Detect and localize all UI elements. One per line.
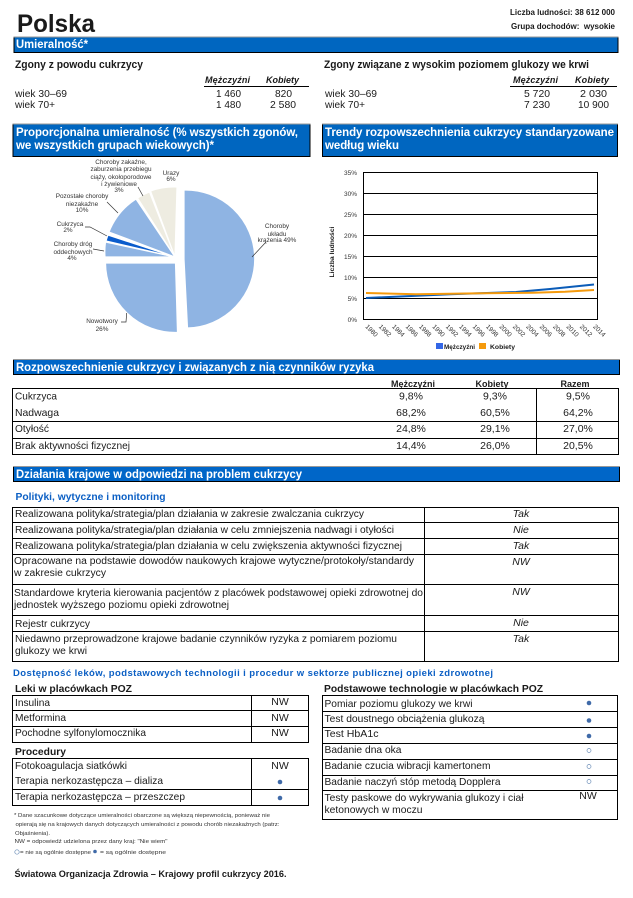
footnotes and legend: = nie są ogólnie dostępne — [20, 850, 92, 856]
table: policies, guidelines and monitoring: w zakresie cukrzycy — [13, 568, 106, 579]
table: medicines in primary care — [12, 683, 308, 742]
subheading: policies: Polityki, wytyczne i monitoring — [16, 491, 166, 503]
table: prevalence and risk factors: Razem — [560, 379, 590, 389]
x axis labels: 2012 — [578, 323, 593, 339]
x axis labels: 2006 — [538, 323, 553, 339]
section header: trends — [322, 124, 618, 156]
section header: proportional mortality — [12, 124, 310, 156]
table: policies, guidelines and monitoring: Tak — [513, 540, 530, 552]
x axis labels: 1996 — [471, 323, 486, 339]
table: policies, guidelines and monitoring: Realizowana polityka/strategia/plan działania w celu zwiększenia aktywności fizycznej — [15, 541, 402, 552]
pie chart: proportional mortality: Choroby dróg — [54, 241, 93, 248]
table: medicines in primary care: NW — [271, 696, 289, 708]
x axis labels: 2004 — [524, 323, 540, 339]
pie chart: proportional mortality: Choroby — [265, 223, 290, 230]
table: policies, guidelines and monitoring: glukozy we krwi — [15, 646, 87, 657]
pie chart: proportional mortality: układu — [268, 231, 287, 238]
table: medicines in primary care: Pochodne sylfonylomocznika — [15, 727, 146, 739]
table: basic technologies in primary care: Badanie naczyń stóp metodą Dopplera — [324, 776, 501, 788]
panel: deaths from diabetes: Mężczyźni — [205, 75, 250, 85]
panel: deaths from high blood glucose: Zgony związane z wysokim poziomem glukozy we krwi — [324, 59, 589, 71]
x axis labels: 1994 — [457, 323, 473, 339]
table: prevalence and risk factors — [12, 379, 618, 454]
footnotes and legend: NW = odpowiedź udzielona przez dany kraj: "Nie wiem" — [14, 839, 168, 845]
x axis labels: 2010 — [565, 323, 580, 339]
y axis labels: 35% — [344, 170, 357, 177]
table: procedures: NW — [271, 760, 289, 772]
section header: proportional mortality: Proporcjonalna umieralność (% wszystkich zgonów, — [16, 127, 298, 139]
table: policies, guidelines and monitoring: NW — [512, 556, 531, 568]
legend: Mężczyźni — [444, 344, 475, 351]
table: basic technologies in primary care: Pomiar poziomu glukozy we krwi — [324, 698, 472, 710]
x axis labels: 2002 — [511, 323, 526, 339]
table: policies, guidelines and monitoring: Tak — [513, 508, 530, 520]
section header: trends: Trendy rozpowszechnienia cukrzycy standaryzowane — [325, 127, 614, 139]
footnotes and legend — [14, 813, 280, 856]
table: basic technologies in primary care: Test HbA1c — [324, 728, 378, 740]
x axis labels: 1980 — [364, 323, 379, 339]
table: prevalence and risk factors: 64,2% — [563, 407, 593, 419]
table: prevalence and risk factors: 20,5% — [563, 440, 593, 452]
pie chart: proportional mortality: 3% — [114, 187, 124, 194]
table: policies, guidelines and monitoring: NW — [512, 586, 531, 598]
table: prevalence and risk factors: 14,4% — [396, 440, 426, 452]
table: policies, guidelines and monitoring: Rejestr cukrzycy — [15, 619, 90, 630]
table: prevalence and risk factors: Brak aktywności fizycznej — [15, 440, 130, 452]
pie chart: proportional mortality: 2% — [63, 227, 73, 234]
table: basic technologies in primary care — [322, 683, 618, 820]
panel: deaths from high blood glucose: Mężczyźni — [513, 75, 558, 85]
footnotes and legend: * Dane szacunkowe dotyczące umieralności obarczone są większą niepewnością, ponieważ nie — [14, 813, 271, 819]
panel: deaths from diabetes: wiek 70+ — [14, 99, 55, 111]
pie chart: proportional mortality: 6% — [166, 176, 176, 183]
table: procedures: Procedury — [15, 746, 66, 758]
table: basic technologies in primary care: ketonowych w moczu — [324, 804, 423, 816]
table: policies, guidelines and monitoring: Tak — [513, 633, 530, 645]
table: policies, guidelines and monitoring: Standardowe kryteria kierowania pacjentów z placówek podstawowej opieki zdrowotnej do — [14, 588, 423, 599]
panel: deaths from diabetes: 1 460 — [216, 88, 241, 100]
table: policies, guidelines and monitoring: jednostek wyższego poziomu opieki zdrowotnej — [13, 600, 229, 611]
table: policies, guidelines and monitoring: Opracowane na podstawie dowodów naukowych krajowe wytyczne/protokoły/standardy — [14, 556, 414, 567]
panel: deaths from high blood glucose — [324, 59, 617, 111]
x axis labels — [364, 323, 607, 339]
series: women — [366, 290, 594, 294]
table: prevalence and risk factors: Nadwaga — [15, 407, 59, 419]
table: procedures — [12, 746, 308, 806]
country meta: population and income group — [510, 8, 616, 31]
table: basic technologies in primary care: NW — [579, 790, 597, 802]
section header: proportional mortality: we wszystkich grupach wiekowych)* — [15, 140, 215, 152]
y axis labels — [344, 170, 357, 324]
table: policies, guidelines and monitoring: Nie — [513, 617, 529, 629]
x axis labels: 1988 — [417, 323, 433, 339]
table: policies, guidelines and monitoring: Realizowana polityka/strategia/plan działania w celu zmniejszenia nadwagi i otyłości — [15, 525, 394, 536]
table: prevalence and risk factors: 29,1% — [480, 423, 510, 435]
x axis labels: 1992 — [444, 323, 459, 339]
x axis labels: 2014 — [591, 323, 607, 339]
table: basic technologies in primary care: Badanie czucia wibracji kamertonem — [324, 760, 491, 772]
panel: deaths from diabetes: 1 480 — [216, 99, 241, 111]
x axis labels: 1984 — [390, 323, 406, 339]
table: basic technologies in primary care: Test doustnego obciążenia glukozą — [324, 713, 485, 725]
section header: trends: według wieku — [324, 140, 399, 152]
footnotes and legend: = są ogólnie dostępne — [100, 850, 167, 856]
panel: deaths from diabetes: 820 — [275, 88, 292, 100]
table: prevalence and risk factors: 60,5% — [480, 407, 510, 419]
pie chart: proportional mortality: Pozostałe choroby — [56, 193, 109, 200]
line chart: age-standardized diabetes prevalence trends — [329, 170, 607, 351]
table: basic technologies in primary care: Testy paskowe do wykrywania glukozy i ciał — [324, 792, 524, 804]
y axis labels: 25% — [344, 212, 357, 219]
table: policies, guidelines and monitoring: Realizowana polityka/strategia/plan działania w zakresie zwalczania cukrzycy — [15, 509, 364, 520]
pie chart: proportional mortality: krążenia 49% — [258, 237, 297, 244]
panel: deaths from high blood glucose: 2 030 — [580, 88, 607, 100]
x axis labels: 1986 — [404, 323, 419, 339]
table: prevalence and risk factors: Otyłość — [15, 423, 49, 435]
pie chart: proportional mortality: 10% — [76, 207, 89, 214]
table: prevalence and risk factors: Cukrzyca — [15, 390, 57, 402]
panel: deaths from high blood glucose: 10 900 — [578, 99, 609, 111]
table: prevalence and risk factors: 9,5% — [566, 390, 590, 402]
pie chart: proportional mortality: 4% — [67, 255, 77, 262]
y axis labels: 15% — [344, 254, 357, 261]
table: medicines in primary care: Insulina — [15, 697, 50, 709]
section header: mortality: Umieralność* — [16, 39, 89, 51]
country meta: population and income group: Grupa dochodów: wysokie — [511, 22, 616, 31]
source line: Światowa Organizacja Zdrowia – Krajowy profil cukrzycy 2016. — [14, 868, 286, 880]
pie chart: proportional mortality: Cukrzyca — [57, 221, 84, 228]
panel: deaths from high blood glucose: wiek 70+ — [324, 99, 365, 111]
table: procedures: Fotokoagulacja siatkówki — [15, 760, 127, 772]
section header: prevalence: Rozpowszechnienie cukrzycy i związanych z nią czynników ryzyka — [16, 362, 375, 374]
table: basic technologies in primary care: Badanie dna oka — [324, 744, 402, 756]
x axis labels: 2000 — [498, 323, 513, 339]
pie chart: proportional mortality: zaburzenia przebiegu — [90, 166, 152, 173]
title: Polska — [17, 10, 96, 38]
x axis labels: 2008 — [551, 323, 567, 339]
panel: deaths from high blood glucose: 5 720 — [524, 88, 550, 100]
pie chart: proportional mortality: Urazy — [163, 170, 180, 177]
y axis title: Liczba ludności — [329, 226, 336, 277]
x axis labels: 1990 — [431, 323, 446, 339]
pie chart: proportional mortality: Choroby zakaźne, — [95, 159, 147, 166]
table: medicines in primary care: Leki w placówkach POZ — [15, 683, 133, 695]
pie chart: proportional mortality — [53, 159, 297, 333]
table: prevalence and risk factors: 68,2% — [396, 407, 426, 419]
pie chart: proportional mortality: niezakaźne — [66, 201, 99, 208]
pie chart: proportional mortality: oddechowych — [53, 249, 93, 256]
table: prevalence and risk factors: 9,3% — [483, 390, 507, 402]
pie chart: proportional mortality: 26% — [96, 326, 109, 333]
panel: deaths from diabetes: 2 580 — [270, 99, 296, 111]
legend: Kobiety — [490, 344, 515, 351]
section header: national response: Działania krajowe w odpowiedzi na problem cukrzycy — [16, 469, 303, 481]
pie chart: proportional mortality: i żywieniowe — [101, 181, 137, 188]
panel: deaths from diabetes: Zgony z powodu cukrzycy — [15, 59, 144, 71]
table: procedures: Terapia nerkozastępcza – dializa — [15, 775, 163, 787]
table: prevalence and risk factors: 9,8% — [399, 390, 423, 402]
y axis labels: 30% — [344, 191, 357, 198]
legend — [436, 343, 515, 351]
table: prevalence and risk factors: 27,0% — [563, 423, 593, 435]
table: basic technologies in primary care: Podstawowe technologie w placówkach POZ — [324, 683, 544, 695]
panel: deaths from diabetes: wiek 30–69 — [14, 88, 67, 100]
panel: deaths from high blood glucose: Kobiety — [575, 75, 610, 85]
section header: mortality — [14, 37, 618, 52]
table: policies, guidelines and monitoring: Nie — [513, 524, 529, 536]
pie chart: proportional mortality: Nowotwory — [86, 318, 119, 325]
series: men — [366, 284, 594, 298]
table: prevalence and risk factors: 26,0% — [480, 440, 510, 452]
y axis labels: 0% — [348, 317, 357, 324]
table: policies, guidelines and monitoring — [12, 508, 618, 662]
country meta: population and income group: Liczba ludności: 38 612 000 — [510, 8, 616, 17]
y axis labels: 5% — [348, 296, 357, 303]
x axis labels: 1982 — [377, 323, 392, 339]
footnotes and legend: Objaśnienia). — [15, 831, 50, 837]
section header: prevalence — [13, 360, 620, 374]
table: medicines in primary care: NW — [271, 712, 289, 724]
x axis labels: 1998 — [484, 323, 500, 339]
panel: deaths from high blood glucose: wiek 30–69 — [324, 88, 377, 100]
table: policies, guidelines and monitoring: Niedawno przeprowadzone krajowe badanie czynników ryzyka z pomiarem poziomu — [15, 634, 397, 645]
table: prevalence and risk factors: Kobiety — [476, 379, 508, 389]
footnotes and legend: opierają się na krajowych danych dotyczących umieralności z powodu chorób niezakaźnych (patrz: — [16, 822, 280, 828]
table: prevalence and risk factors: Mężczyźni — [391, 379, 435, 389]
table: prevalence and risk factors: 24,8% — [396, 423, 426, 435]
table: medicines in primary care: NW — [271, 727, 289, 739]
y axis labels: 20% — [344, 233, 357, 240]
panel: deaths from diabetes — [14, 59, 309, 111]
section header: national response — [13, 466, 620, 482]
table: procedures: Terapia nerkozastępcza – przeszczep — [15, 791, 185, 803]
panel: deaths from diabetes: Kobiety — [266, 75, 300, 85]
y axis labels: 10% — [344, 275, 357, 282]
table: medicines in primary care: Metformina — [15, 712, 66, 724]
panel: deaths from high blood glucose: 7 230 — [524, 99, 550, 111]
subheading: availability: Dostępność leków, podstawowych technologii i procedur w sektorze publicznej opieki zdrowotnej — [13, 668, 493, 679]
pie chart: proportional mortality: ciąży, okołoporodowe — [91, 174, 152, 181]
